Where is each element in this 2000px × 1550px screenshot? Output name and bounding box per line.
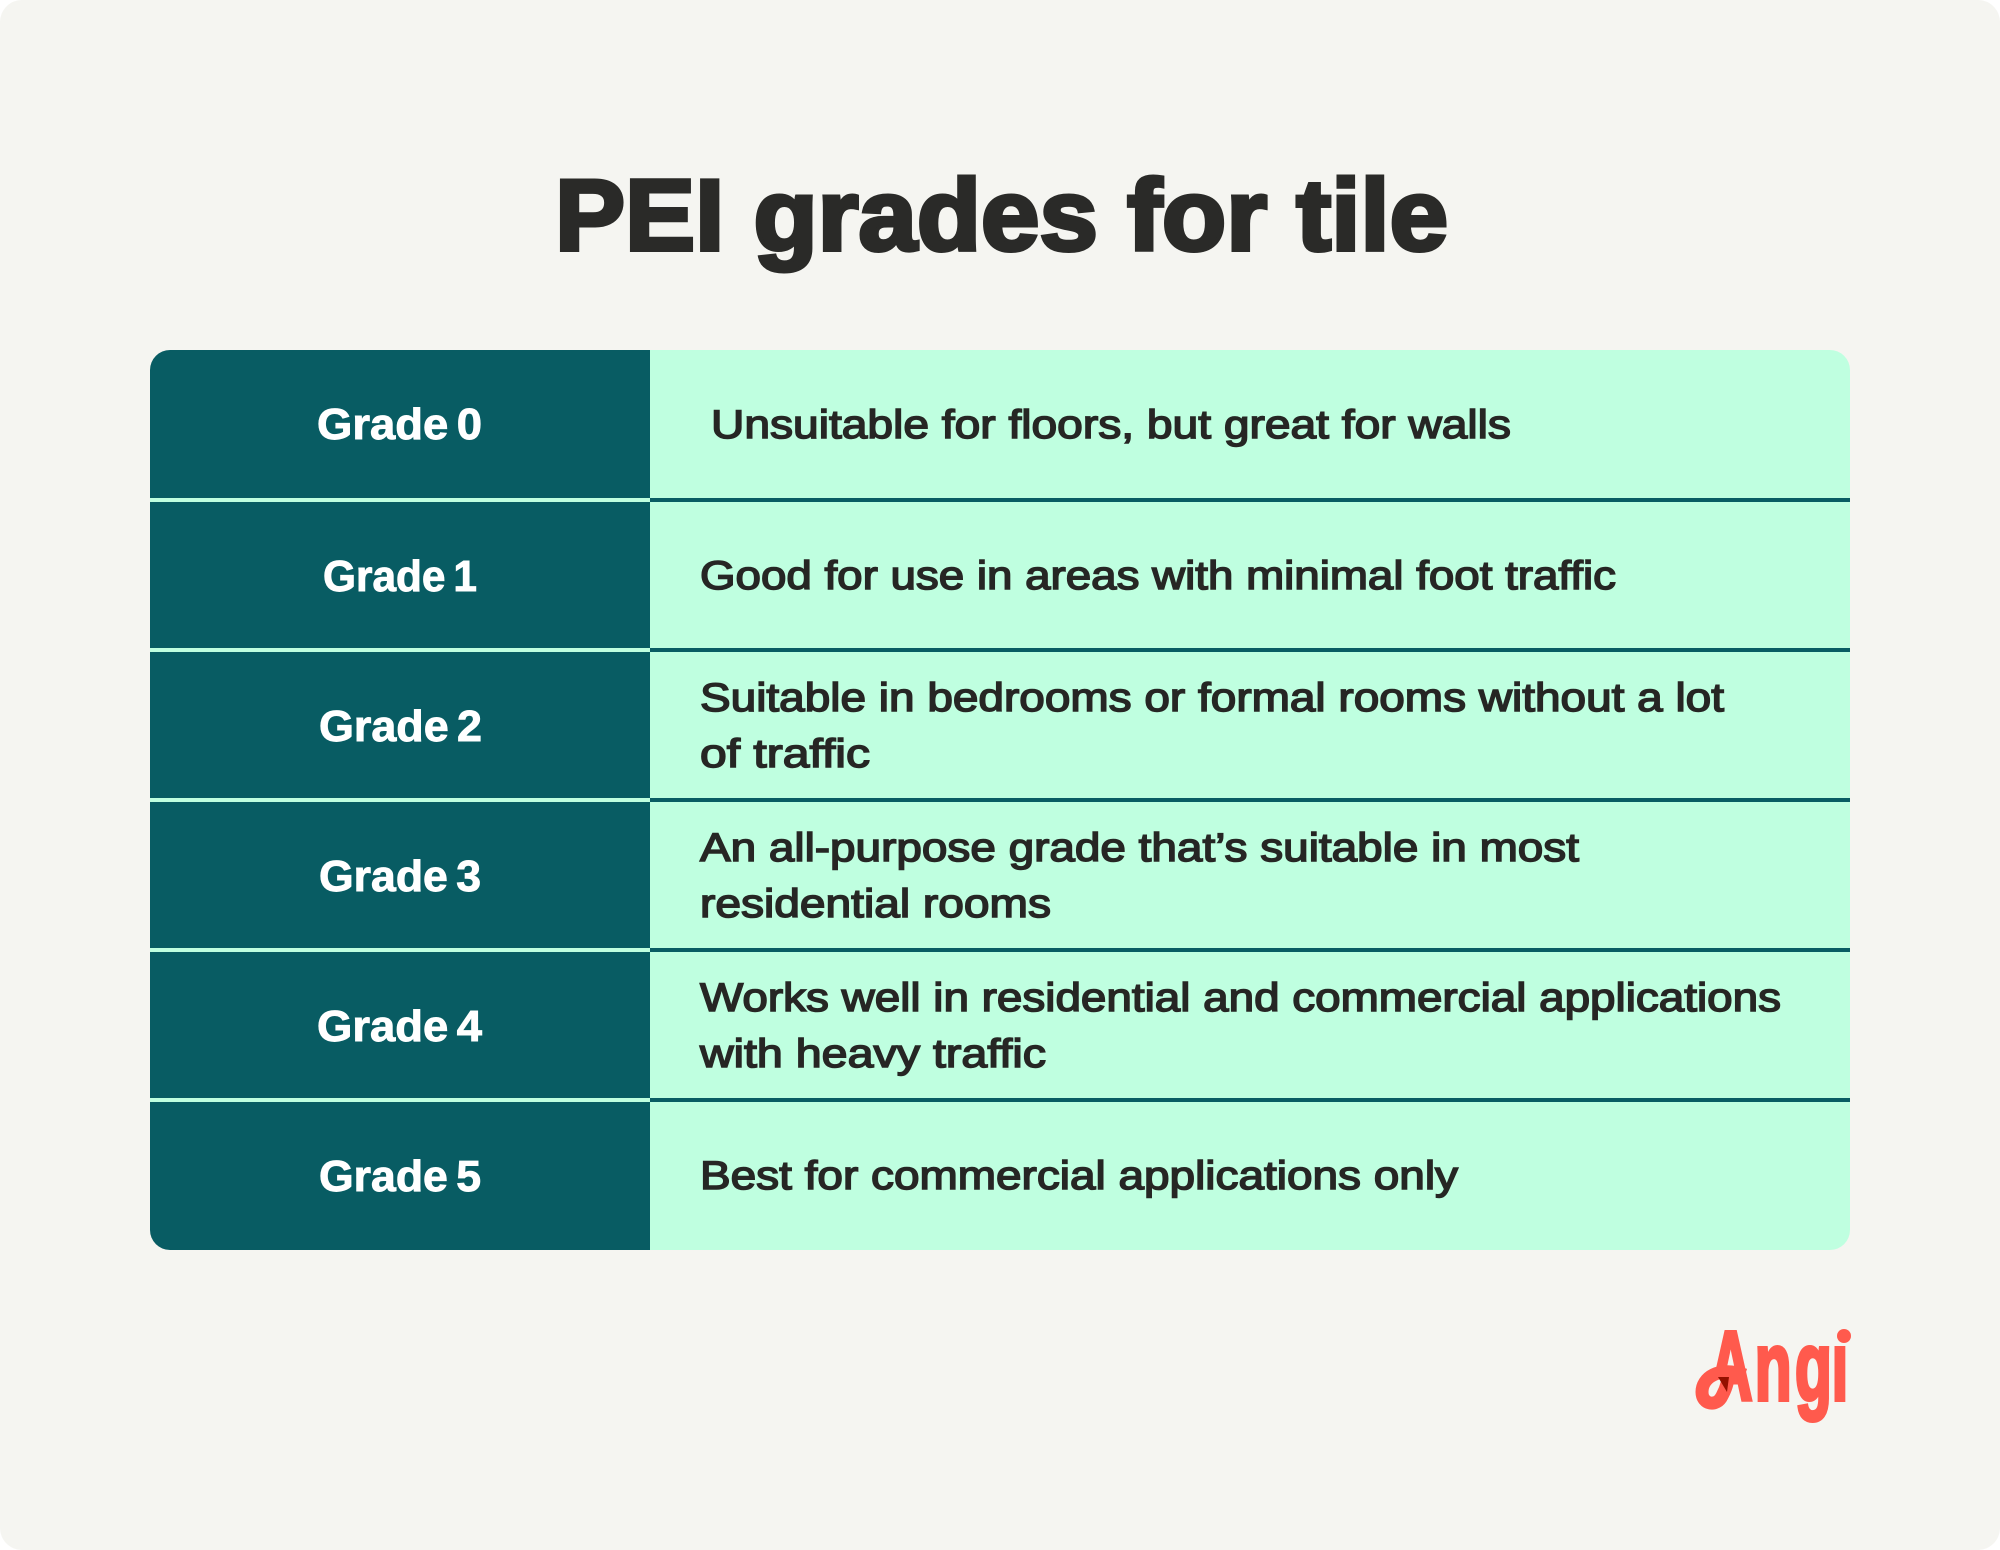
row: Grade 0: Grade 0 (317, 400, 482, 449)
row: Grade 5 (319, 1152, 1458, 1201)
row: Grade 4: Works well in residential and commercial applications (700, 976, 1781, 1020)
row: Grade 1 (323, 552, 1616, 601)
row: Grade 3 (319, 826, 1579, 926)
row: Grade 4: with heavy traffic (699, 1032, 1046, 1076)
row: Grade 2: Suitable in bedrooms or formal rooms without a lot (700, 676, 1724, 720)
row: Grade 2: Grade 2 (319, 702, 482, 751)
row: Grade 2 (319, 676, 1724, 776)
title: PEI grades for tile (555, 160, 1448, 272)
row: Grade 4: Grade 4 (317, 1002, 483, 1051)
row: Grade 0: Unsuitable for floors, but great for walls (711, 403, 1511, 447)
row: Grade 3: residential rooms (700, 882, 1051, 926)
row: Grade 1: Good for use in areas with minimal foot traffic (700, 554, 1616, 598)
row: Grade 2: of traffic (700, 732, 870, 776)
row: Grade 0 (317, 400, 1511, 449)
row: Grade 5: Grade 5 (319, 1152, 481, 1201)
row: Grade 3: Grade 3 (319, 852, 481, 901)
panel: PEI grades table (150, 350, 1850, 1250)
row: Grade 1: Grade 1 (323, 552, 477, 601)
row: Grade 3: An all-purpose grade that’s suitable in most (700, 826, 1579, 870)
row: Grade 4 (317, 976, 1781, 1076)
logo: Angi: Angi (1709, 1312, 1848, 1422)
row: Grade 5: Best for commercial applications only (700, 1154, 1458, 1198)
